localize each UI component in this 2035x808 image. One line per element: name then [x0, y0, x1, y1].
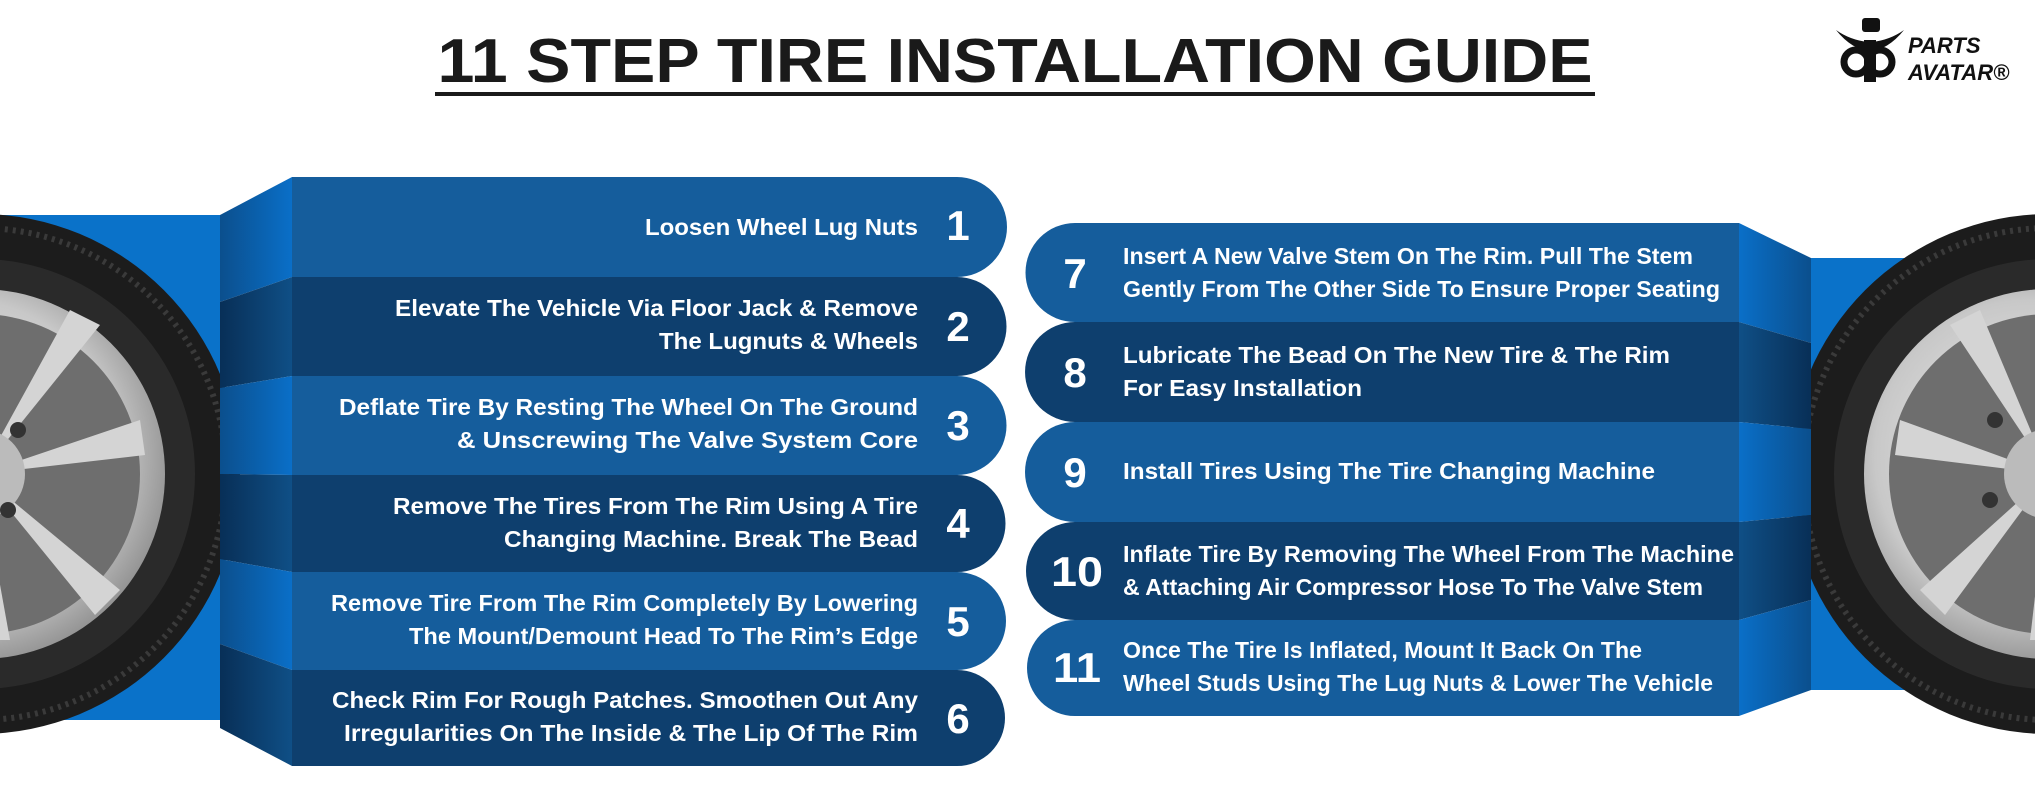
step 10: 10	[1051, 548, 1103, 595]
step 7: Gently From The Other Side To Ensure Proper Seating	[1123, 276, 1720, 302]
step 11: 11	[1053, 644, 1101, 691]
step 4: Changing Machine. Break The Bead	[504, 526, 918, 552]
step 9	[1025, 422, 1739, 522]
step 3: Deflate Tire By Resting The Wheel On The Ground	[339, 394, 918, 420]
step 5: The Mount/Demount Head To The Rim’s Edge	[409, 623, 918, 649]
step 5: Remove Tire From The Rim Completely By Lowering	[331, 590, 918, 616]
step 10: & Attaching Air Compressor Hose To The Valve Stem	[1123, 574, 1703, 600]
icon: left tire	[0, 214, 240, 734]
step 3: & Unscrewing The Valve System Core	[457, 427, 918, 453]
panel: steps 7-11	[1025, 223, 1739, 716]
step 8: Lubricate The Bead On The New Tire & The Rim	[1123, 342, 1670, 368]
step 7: 7	[1063, 250, 1087, 297]
title: 11 STEP TIRE INSTALLATION GUIDE	[438, 27, 1592, 96]
logo: Parts Avatar: AVATAR®	[1907, 60, 2010, 85]
left background block	[0, 215, 220, 720]
step 6: 6	[946, 695, 970, 742]
step 2: The Lugnuts & Wheels	[659, 328, 918, 354]
step 9: 9	[1063, 449, 1087, 496]
step 10: Inflate Tire By Removing The Wheel From The Machine	[1123, 541, 1734, 567]
step 4: Remove The Tires From The Rim Using A Tire	[393, 493, 918, 519]
step 8: 8	[1063, 349, 1087, 396]
step 11: Wheel Studs Using The Lug Nuts & Lower The Vehicle	[1123, 670, 1713, 696]
step 4: 4	[946, 500, 970, 547]
left folds	[220, 177, 292, 766]
step 4	[292, 475, 1006, 572]
step 8: For Easy Installation	[1123, 375, 1362, 401]
step 10	[1026, 522, 1739, 620]
right background block	[1811, 258, 2035, 690]
panel: steps 1-6	[292, 177, 1007, 766]
step 2: Elevate The Vehicle Via Floor Jack & Remove	[395, 295, 918, 321]
step 2: 2	[946, 303, 970, 350]
step 6: Irregularities On The Inside & The Lip Of The Rim	[344, 720, 918, 746]
step 9: Install Tires Using The Tire Changing Machine	[1123, 458, 1655, 484]
right folds	[1739, 223, 1811, 716]
step 11	[1027, 620, 1739, 716]
icon: right tire	[1789, 214, 2035, 734]
step 1: 1	[946, 202, 970, 249]
step 5: 5	[946, 598, 970, 645]
step 2	[292, 277, 1007, 376]
step 1: Loosen Wheel Lug Nuts	[645, 214, 918, 240]
logo: Parts Avatar	[1836, 18, 2010, 85]
step 3	[292, 376, 1007, 475]
step 3: 3	[946, 402, 970, 449]
step 6	[292, 670, 1005, 766]
step 11: Once The Tire Is Inflated, Mount It Back On The	[1123, 637, 1642, 663]
step 7: Insert A New Valve Stem On The Rim. Pull The Stem	[1123, 243, 1693, 269]
step 8	[1025, 322, 1739, 422]
step 7	[1026, 223, 1739, 322]
step 6: Check Rim For Rough Patches. Smoothen Out Any	[332, 687, 918, 713]
logo: Parts Avatar: PARTS	[1908, 33, 1981, 58]
step 5	[292, 572, 1006, 670]
step 1	[292, 177, 1007, 277]
